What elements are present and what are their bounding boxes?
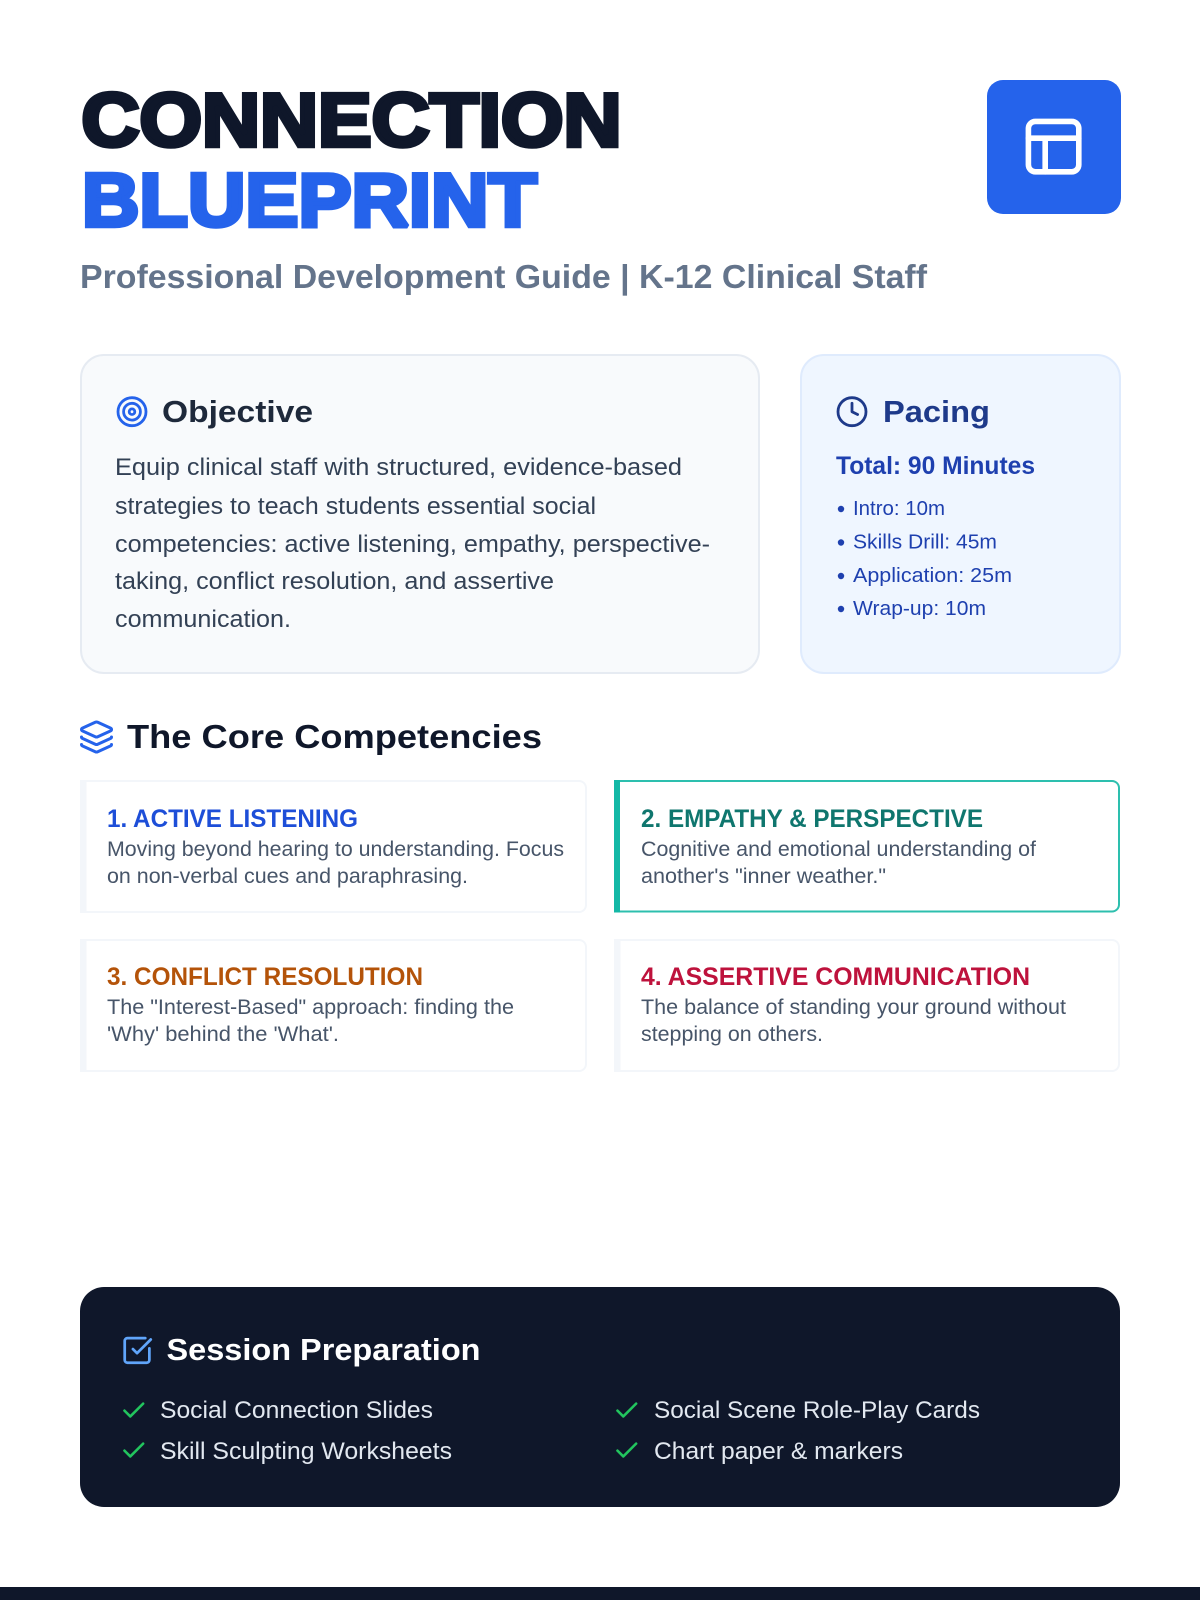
checklist item: slides: Social Connection Slides	[160, 1397, 433, 1424]
icon: check square	[125, 1338, 151, 1363]
title line: CONNECTION: CONNECTION	[82, 78, 622, 162]
icon: clock	[838, 398, 866, 426]
header: title block	[80, 78, 928, 295]
card: active listening: 1. ACTIVE LISTENING	[107, 805, 358, 833]
card: assertive communication: The balance of standing your ground without	[641, 996, 1066, 1019]
icon: blueprint layout badge	[987, 80, 1121, 214]
panel: objective	[81, 355, 759, 673]
card: empathy and perspective (highlighted): 2. EMPATHY & PERSPECTIVE	[641, 805, 983, 833]
card: active listening: Moving beyond hearing to understanding. Focus	[107, 838, 564, 861]
pacing schedule list: Intro: 10m	[853, 497, 945, 520]
checklist item: role-play cards: Social Scene Role-Play Cards	[654, 1397, 980, 1424]
footer bar	[0, 1587, 1200, 1600]
icon: layers	[81, 722, 112, 752]
pacing schedule list: Skills Drill: 45m	[853, 530, 997, 554]
objective body text: Equip clinical staff with structured, evidence-based	[115, 454, 682, 481]
card: conflict resolution: 'Why' behind the 'What'.	[107, 1023, 339, 1046]
card: conflict resolution: 3. CONFLICT RESOLUTION	[107, 963, 423, 991]
card: empathy and perspective (highlighted): another's "inner weather."	[641, 865, 886, 888]
objective body text: communication.	[115, 606, 291, 633]
card: empathy and perspective (highlighted)	[614, 780, 1120, 912]
checklist item: worksheets: Skill Sculpting Worksheets	[160, 1438, 452, 1465]
objective body text	[115, 454, 710, 633]
heading: objective: Objective	[162, 394, 313, 429]
card: active listening: on non-verbal cues and paraphrasing.	[107, 865, 468, 888]
card: empathy and perspective (highlighted): Cognitive and emotional understanding of	[641, 838, 1036, 861]
panel: session preparation	[80, 1287, 1120, 1507]
panel: pacing	[801, 355, 1120, 673]
card: conflict resolution	[80, 939, 587, 1072]
objective body text: taking, conflict resolution, and assertive	[115, 568, 554, 595]
card: assertive communication: 4. ASSERTIVE COMMUNICATION	[641, 963, 1030, 991]
checklist item: chart paper: Chart paper & markers	[654, 1438, 903, 1465]
heading text: The Core Competencies	[127, 718, 542, 755]
objective body text: competencies: active listening, empathy, perspective-	[115, 531, 710, 558]
card: assertive communication: stepping on others.	[641, 1023, 823, 1046]
heading: pacing: Pacing	[883, 394, 990, 429]
pacing schedule list: Wrap-up: 10m	[853, 597, 986, 620]
total time: Total: 90 Minutes	[836, 452, 1035, 480]
card: assertive communication	[614, 939, 1120, 1072]
card: conflict resolution: The "Interest-Based" approach: finding the	[107, 996, 514, 1019]
section heading: core competencies	[81, 718, 542, 755]
subtitle: Professional Development Guide | K-12 Clinical Staff	[80, 258, 928, 295]
pacing schedule list: Application: 25m	[853, 564, 1012, 587]
objective body text: strategies to teach students essential social	[115, 493, 596, 520]
pacing schedule list	[838, 497, 1012, 620]
title line: BLUEPRINT: BLUEPRINT	[82, 158, 537, 242]
heading: session preparation: Session Preparation	[166, 1332, 480, 1367]
icon: target	[118, 398, 146, 426]
card: active listening	[80, 780, 587, 913]
